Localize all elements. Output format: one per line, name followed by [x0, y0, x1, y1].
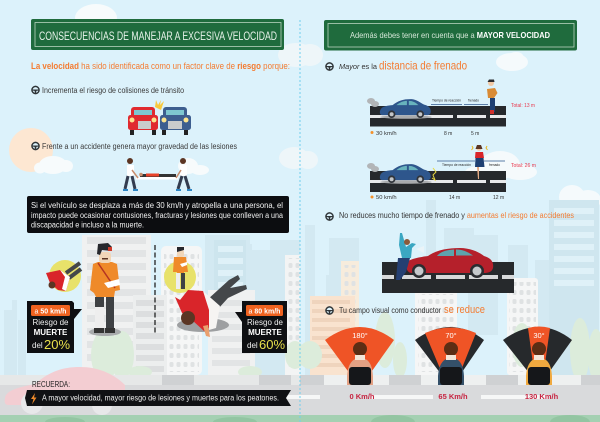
diagram: braking at 30 km/h: Tiempo de reacción — [432, 98, 461, 102]
text: riesgo de accidentes: No reduces mucho tiempo de frenado y aumentas el riesgo de accidentes — [339, 211, 574, 220]
icon: car collision — [128, 100, 191, 135]
diagram: braking at 30 km/h: frenado — [468, 98, 479, 102]
diagram: braking at 50 km/h: frenado — [489, 163, 500, 167]
callout: black text box — [27, 196, 289, 233]
callout: 50 km/h risk: Riesgo de — [32, 318, 69, 327]
text: distancia de frenado: Mayor es la — [339, 62, 378, 71]
chart: vision field 180 degrees: 180° — [352, 331, 368, 340]
peach and white towers, right page — [341, 261, 359, 375]
text: recuerda: RECUERDA: — [32, 380, 70, 389]
text: se reduce — [339, 304, 485, 316]
text: colisiones: Incrementa el riesgo de colisiones de tránsito — [42, 86, 184, 95]
banner: recuerda message: A mayor velocidad, mayor riesgo de lesiones y muertes para los peatones. — [42, 394, 279, 402]
text: se reduce: se reduce — [444, 304, 485, 316]
callout: 60 km/h risk: a 80 km/h — [249, 308, 280, 316]
callout: 50 km/h risk — [27, 301, 82, 353]
callout: 50 km/h risk: a 50 km/h — [35, 308, 66, 316]
callout: 60 km/h risk: Riesgo de — [247, 318, 284, 327]
callout: black text box: discapacidad e incluso a la muerte. — [31, 220, 144, 230]
background trees — [91, 312, 600, 382]
intro text: La velocidad ha sido identificada como un factor clave de riesgo porque: — [31, 61, 290, 71]
chart: vision field 30 degrees: 30° — [533, 331, 545, 340]
text: distancia de frenado — [339, 58, 467, 72]
background clouds and sun — [9, 4, 600, 210]
callout: 50 km/h risk: MUERTE — [34, 328, 68, 337]
heading: consecuencias: CONSECUENCIAS DE MANEJAR A EXCESIVA VELOCIDAD — [39, 29, 277, 43]
label: 130 km/h: 130 Km/h — [525, 392, 559, 401]
diagram: braking at 30 km/h: 30 km/h — [376, 131, 397, 137]
banner: recuerda message — [25, 390, 291, 406]
callout: 60 km/h risk — [235, 301, 287, 353]
road and curb — [0, 375, 600, 422]
label: 65 km/h: 65 Km/h — [438, 392, 468, 401]
diagram: braking at 50 km/h — [367, 145, 536, 201]
diagram: braking at 50 km/h: 12 m — [493, 195, 504, 201]
callout: black text box: impacto puede ocasionar contusiones, fracturas y lesiones que conlleven a una — [31, 211, 284, 220]
illustration: stretcher — [123, 158, 192, 190]
callout: 50 km/h risk: del — [32, 341, 43, 350]
icon: steering wheel — [31, 86, 40, 94]
chart: vision field 70 degrees — [415, 327, 484, 385]
diagram: braking at 50 km/h: 14 m — [449, 195, 460, 201]
diagram: braking at 30 km/h: 5 m — [471, 131, 479, 137]
heading: mayor velocidad — [324, 20, 577, 50]
diagram: braking at 50 km/h: 50 km/h — [376, 195, 397, 201]
callout: black text box: Si el vehículo se desplaza a más de 30 km/h y atropella a una persona, el — [31, 201, 283, 210]
divider: dashed line — [154, 245, 156, 335]
diagram: braking at 50 km/h: Tiempo de reacción — [442, 163, 471, 167]
callout: 60 km/h risk: del — [247, 341, 258, 350]
callout: 50 km/h risk: 20% — [44, 337, 70, 352]
callout: 60 km/h risk: MUERTE — [248, 328, 283, 337]
icon: steering wheel — [325, 306, 334, 315]
icon: steering wheel — [31, 142, 40, 150]
label: 0 km/h: 0 Km/h — [349, 392, 375, 401]
illustration: small standing pedestrian — [164, 247, 196, 293]
diagram: braking at 30 km/h: 8 m — [444, 131, 452, 137]
callout: 60 km/h risk: 60% — [259, 337, 285, 352]
background city skyline — [4, 200, 599, 375]
heading: mayor velocidad: Además debes tener en cuenta que a MAYOR VELOCIDAD — [350, 30, 550, 40]
chart: vision field 180 degrees — [325, 327, 394, 385]
diagram: braking at 50 km/h: Total: 26 m — [511, 163, 536, 169]
chart: vision field 70 degrees: 70° — [445, 331, 457, 340]
icon: steering wheel — [325, 62, 334, 71]
illustration: standing pedestrian at 50 km/h — [89, 243, 121, 336]
diagram: braking at 30 km/h: Total: 13 m — [511, 103, 535, 109]
white striped tower — [82, 235, 151, 375]
text: se reduce: Tu campo visual como conductor — [339, 306, 441, 315]
page divider — [299, 20, 301, 422]
text: lesiones: Frente a un accidente genera mayor gravedad de las lesiones — [42, 142, 237, 151]
chart: vision field 30 degrees — [503, 326, 572, 385]
illustration: small fallen pedestrian — [46, 260, 81, 292]
faded pink car on road — [5, 367, 125, 415]
heading: consecuencias — [31, 19, 284, 50]
illustration: large fallen pedestrian at 80 km/h — [175, 275, 247, 337]
illustration: car hitting pedestrian — [382, 233, 514, 293]
text: distancia de frenado: distancia de frenado — [379, 58, 467, 72]
diagram: braking at 30 km/h — [367, 80, 535, 137]
icon: steering wheel — [325, 212, 334, 221]
